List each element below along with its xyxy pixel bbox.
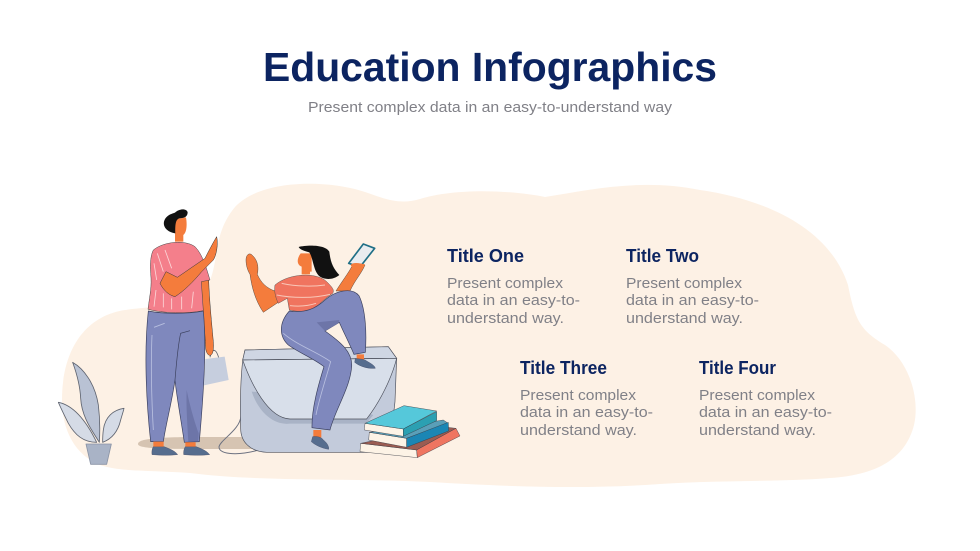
phone with hand [349,244,375,271]
woman right arm [336,263,365,291]
title: Education Infographics [263,44,717,90]
plant leaves [58,362,124,442]
text block: Title Four: understand way. [699,423,816,439]
text block: Title Three: Title Three [520,358,607,378]
man trousers [146,311,205,442]
woman hair and head [298,246,339,279]
man shoes [152,447,178,455]
floor shadow [138,437,262,449]
figure: woman on bag with books [240,244,460,458]
text block: Title One: data in an easy-to- [447,293,580,309]
woman feet [313,354,364,438]
large satchel bag [240,347,397,452]
text block: Title Two [626,246,759,327]
woman left raised arm [246,254,279,312]
text block: Title Four: Title Four [699,358,776,378]
plant pot [86,444,111,464]
man back arm [201,280,213,355]
text block: Title Three: understand way. [520,423,637,439]
text block: Title Two: data in an easy-to- [626,293,759,309]
woman shirt [275,275,333,312]
book stack [360,406,460,458]
woman trousers [281,291,366,430]
text block: Title One: Title One [447,246,524,266]
text block: Title Three [520,358,653,439]
text block: Title Two: Title Two [626,246,699,266]
icon: potted plant [58,362,124,464]
man head [164,209,188,242]
background blob [62,184,916,487]
text block: Title One: Present complex [447,276,564,292]
man raised arm [160,237,217,297]
text block: Title One: understand way. [447,311,564,327]
subtitle: Present complex data in an easy-to-understand way [308,99,673,116]
figure: man [146,209,229,455]
man shirt [148,242,210,313]
text block: Title Two: Present complex [626,276,743,292]
text block: Title One [447,246,580,327]
text block: Title Four [699,358,832,439]
middle book [369,432,407,447]
bag cable [219,416,262,454]
text block: Title Three: Present complex [520,388,637,404]
text block: Title Two: understand way. [626,311,743,327]
bottom book [360,443,417,458]
text block: Title Three: data in an easy-to- [520,405,653,421]
text block: Title Four: Present complex [699,388,816,404]
shopping bag [204,350,229,385]
text block: Title Four: data in an easy-to- [699,405,832,421]
top book [364,423,403,436]
